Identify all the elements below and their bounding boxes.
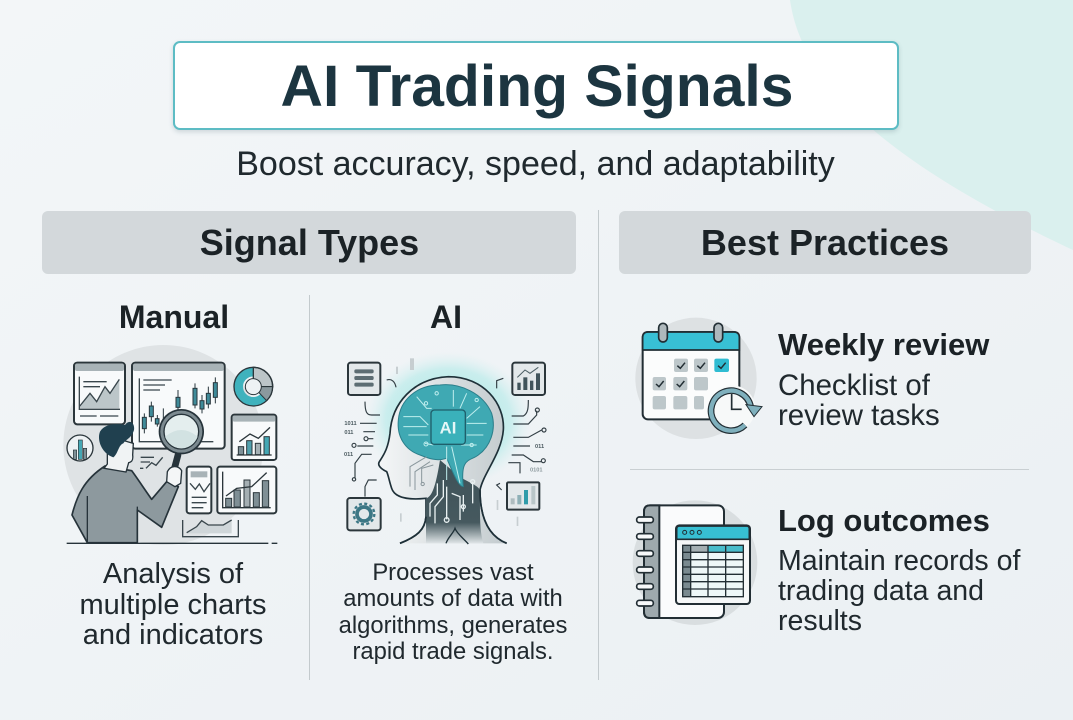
binary labels: 011 <box>344 430 353 436</box>
small line chart <box>79 379 119 408</box>
panel: log outcomes <box>632 500 1020 637</box>
pie chart <box>239 372 268 401</box>
AI description: Processes vast <box>372 559 534 586</box>
illustration: analyst with charts <box>64 345 278 545</box>
magnifier <box>174 455 178 470</box>
manual description: Analysis of <box>103 558 243 590</box>
brain <box>398 385 493 487</box>
panel: manual <box>80 299 266 651</box>
AI description: rapid trade signals. <box>352 638 554 665</box>
log outcomes description: Maintain records of <box>778 545 1020 577</box>
small arrow note <box>140 457 163 468</box>
AI description: algorithms, generates <box>339 612 567 639</box>
mini report <box>191 471 207 477</box>
subtitle: Boost accuracy, speed, and adaptability <box>236 145 835 183</box>
AI chip <box>431 410 465 444</box>
connected boxes <box>347 363 545 530</box>
head <box>379 377 507 543</box>
AI heading: AI <box>430 299 462 335</box>
large bars <box>226 480 269 507</box>
heading: signal types <box>42 211 576 274</box>
illustration: AI head <box>344 358 547 544</box>
log outcomes description: trading data and <box>778 575 984 607</box>
log outcomes description <box>778 545 1020 637</box>
bar chart small <box>238 437 269 455</box>
weekly review description: Checklist of <box>778 369 930 402</box>
manual description <box>80 558 266 651</box>
divider columns <box>598 210 599 680</box>
illustration: AI head: AI <box>440 418 456 437</box>
gear <box>357 507 371 521</box>
binary labels <box>344 421 544 473</box>
candlestick chart <box>139 378 213 442</box>
lower chart <box>183 520 238 537</box>
binary labels: 011 <box>344 452 353 458</box>
heading text: best practices: Best Practices <box>701 222 949 263</box>
binary labels: 011 <box>535 444 544 450</box>
binary labels: 1011 <box>344 421 357 427</box>
circuits in face and neck <box>410 457 433 490</box>
title box <box>173 41 899 130</box>
manual description: and indicators <box>83 619 263 651</box>
panel: weekly review <box>636 318 990 439</box>
binary labels: 0101 <box>530 467 543 473</box>
log outcomes description: results <box>778 605 862 637</box>
log outcomes title: Log outcomes <box>778 503 990 538</box>
heading text: signal types: Signal Types <box>200 222 419 263</box>
weekly review description: review tasks <box>778 399 940 432</box>
hair <box>99 422 134 457</box>
AI description <box>339 559 567 665</box>
round bars <box>67 435 93 461</box>
weekly review description <box>778 369 940 432</box>
hand <box>167 467 182 487</box>
AI description: amounts of data with <box>343 585 563 612</box>
lines <box>352 378 546 497</box>
title: AI Trading Signals <box>281 54 793 119</box>
manual heading: Manual <box>119 299 229 335</box>
manual description: multiple charts <box>80 588 266 620</box>
weekly review title: Weekly review <box>778 327 989 362</box>
panel: AI <box>339 299 567 665</box>
icon: notebook with table <box>632 500 758 625</box>
baseline <box>67 541 277 545</box>
person <box>72 466 178 543</box>
icon: calendar with clock <box>636 318 763 439</box>
heading: best practices <box>619 211 1031 274</box>
